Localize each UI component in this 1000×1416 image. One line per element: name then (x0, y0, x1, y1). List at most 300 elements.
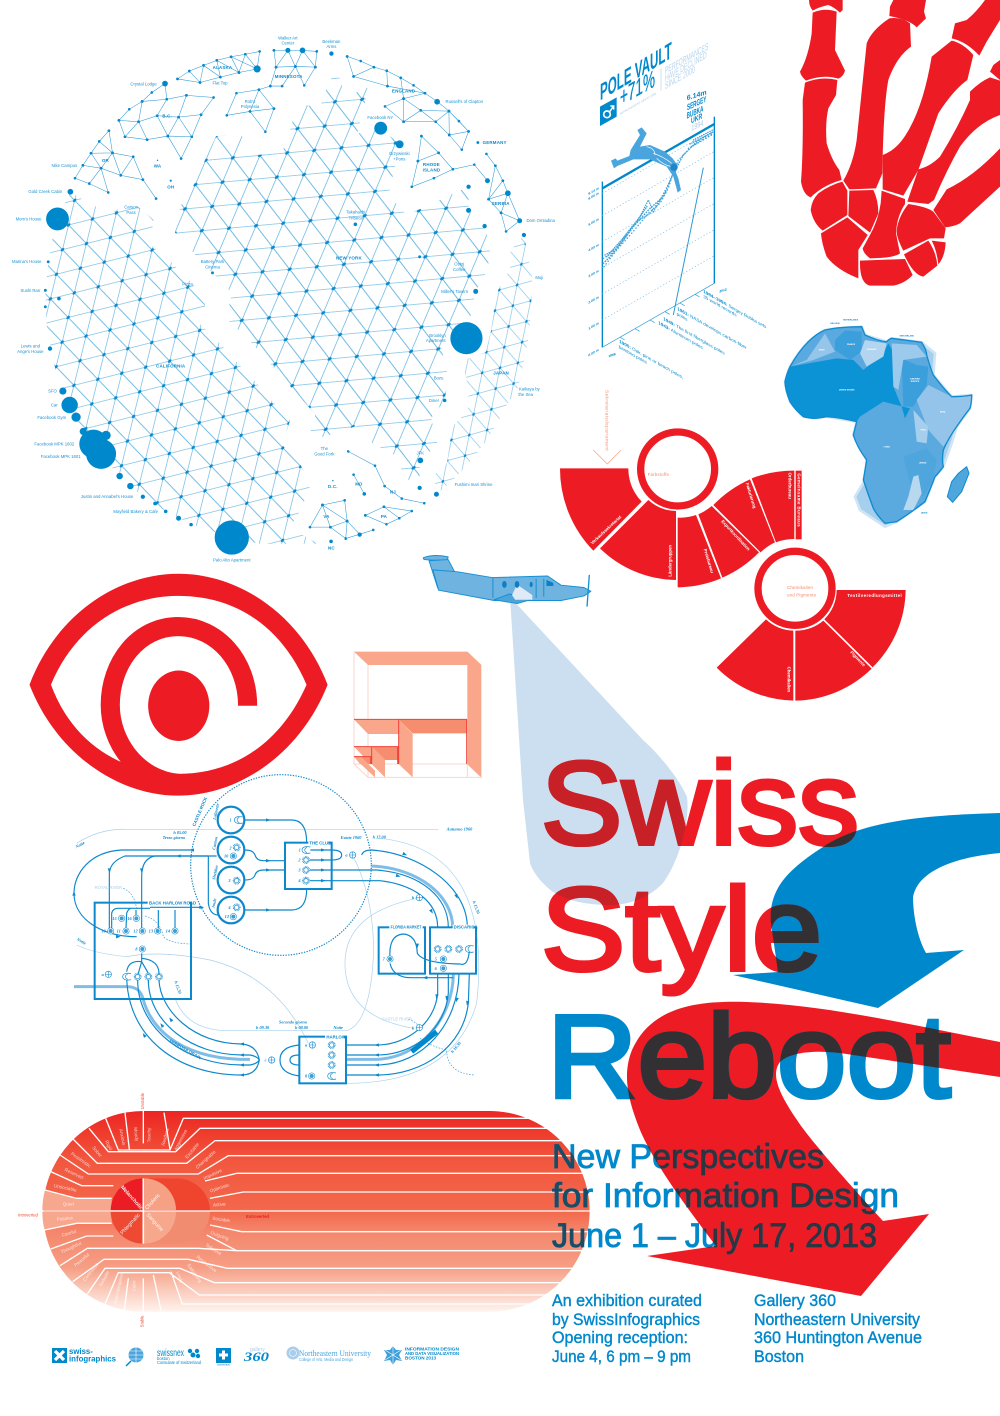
station and time labels: 12 (133, 929, 138, 934)
logo: Northeastern University (286, 1346, 371, 1362)
place labels: Lewis and (21, 343, 41, 348)
place labels: Crystal Lodge (130, 82, 157, 87)
fan: Farbstoffe: Gemeinsame Bureaus (797, 473, 802, 527)
title: Swiss Style Reboot: Style (541, 864, 822, 996)
thin pale rivers and timelines (77, 829, 479, 1083)
station and time labels: FLORIDA MARKET (391, 925, 422, 930)
figure: pole vaulter (611, 127, 681, 193)
place labels: The (321, 446, 329, 451)
station and time labels: a (305, 1043, 308, 1048)
transit-style flow diagram (72, 775, 481, 1083)
trait labels: Optimistic (209, 1182, 231, 1193)
fan: Chemikalien und Pigmente: Pigmente (849, 650, 867, 668)
station and time labels: h 08.00 (295, 1025, 309, 1030)
temperament quadrants: Sanguine (145, 1212, 164, 1233)
station and time labels: h 12.00 (373, 835, 387, 840)
place labels: Grzywinski (389, 151, 410, 156)
place labels: JAPAN (493, 370, 509, 375)
heading: SINCE 2000 (665, 65, 695, 92)
station and time labels: h 15.30 (173, 980, 183, 995)
text block: venue: Gallery 360 (754, 1292, 836, 1310)
text block: venue: 360 Huntington Avenue (754, 1329, 922, 1347)
place labels: Takahachi (346, 210, 365, 215)
axis labels: 0.00 m (588, 348, 599, 358)
station and time labels: 1 (299, 847, 301, 852)
trait labels: Reserved (64, 1167, 84, 1180)
subtitle and dates: for Information Design (552, 1177, 899, 1215)
station and time labels: Secondo giorno (279, 1020, 308, 1025)
place labels: Pizza (182, 282, 193, 287)
axis labels: Stable (139, 1315, 144, 1327)
personality temperament diagram (pill) (18, 1092, 610, 1327)
timeline notes: 1949: The first fiberglass poles (663, 316, 725, 357)
location circles sized by importance (44, 47, 526, 555)
place labels: NC (328, 545, 335, 550)
logo: gallery 360: 360 (243, 1350, 270, 1364)
blue arrow (733, 813, 1000, 1008)
record holder label: UKR (691, 111, 702, 125)
place labels: Center (281, 41, 295, 46)
record holder label: SERGEY (687, 94, 706, 112)
timeline notes: bamboo poles (619, 344, 647, 366)
place labels: Fushimi Inari Shrine (455, 482, 493, 487)
map labels: FRANCE (847, 343, 856, 346)
fan: Chemikalien und Pigmente: und Pigmente (787, 592, 817, 597)
timeline notes: 1984–1994: Sergey Bubka sets (703, 289, 767, 331)
trait labels: Touchy (147, 1127, 152, 1142)
route lines (74, 820, 469, 1076)
place labels: Miller's Tavern (441, 289, 469, 294)
heading: IMPROVEMENT SINCE 1896 (620, 91, 656, 116)
timeline notes: poles (677, 311, 688, 323)
place labels: Coffee (453, 267, 466, 272)
place labels: Cinema (205, 265, 220, 270)
place labels: GERMANY (483, 140, 507, 145)
mesh: California (45, 192, 317, 544)
timeline notes: 35 world records (703, 294, 737, 319)
place labels: Marina's House (12, 259, 42, 264)
heading: HAVE DECLINED (665, 50, 707, 84)
place labels: Rob's (245, 99, 255, 104)
station and time labels: Notte (75, 936, 87, 946)
station and time labels: 12 (225, 914, 230, 919)
trait labels: Easygoing (186, 1263, 203, 1284)
place labels: Facebook NY (367, 115, 393, 120)
place labels: MINNESOTA (275, 74, 303, 79)
trait labels: Active (213, 1202, 226, 1207)
text block: exhibition details: by SwissInfographics (552, 1311, 700, 1329)
trait labels: Calm (132, 1280, 137, 1291)
place labels: Dom Omladina (526, 218, 556, 223)
station and time labels: DISCARICA (454, 925, 479, 930)
place labels: Walker Art (278, 35, 298, 40)
temperament quadrants: Phlegmatic (120, 1212, 142, 1236)
lighter left sectors: Quiet and Passive (42, 1190, 112, 1230)
heading: PERFORMANCES (665, 42, 708, 77)
fan: Farbstoffe: Verkaufssekretariat (590, 514, 623, 545)
place labels: CALIFORNIA (156, 363, 186, 368)
station and time labels: h 16.30 (450, 1040, 462, 1054)
station and time labels: 3 (227, 878, 231, 883)
heading (600, 37, 708, 116)
subtitle and dates: New Perspectives (552, 1138, 824, 1176)
station and time labels: 16 (127, 916, 132, 921)
station and time labels: 6 (435, 966, 438, 971)
place labels: Justin and Annabel's House (81, 494, 134, 499)
station and time labels: 14 (166, 929, 171, 934)
map labels: BELGIUM (830, 323, 840, 325)
axis labels: Unstable (140, 1092, 145, 1109)
station and time labels: h 09.30 (256, 1025, 270, 1030)
place labels: the Sea (518, 392, 534, 397)
place labels: Mayfield Bakery & Cafe (113, 509, 159, 514)
map labels: SPAIN (819, 349, 825, 352)
logo: swissnex: swissnex (157, 1347, 184, 1359)
place labels: Nike Campus (51, 163, 77, 168)
station and time labels: Autunno 1960 (446, 827, 473, 832)
nested 3D treemap (354, 652, 481, 777)
trait labels: Peaceful (73, 1252, 90, 1268)
place labels: Good Fork (314, 451, 335, 456)
station and time labels: Joule (210, 898, 217, 910)
title: Swiss Style Reboot: Style (541, 864, 822, 996)
place labels: Brooklyn (429, 333, 446, 338)
fan: Farbstoffe: Fakturierung (745, 482, 757, 509)
place labels: Gold Creek Cabin (28, 189, 63, 194)
station and time labels: Estate 1960 (340, 835, 362, 840)
place labels: Bozu (434, 376, 444, 381)
record holder label: 1994 (691, 118, 704, 133)
logo: swiss-infographics: swiss- (69, 1347, 93, 1356)
logo: globe magnifier (126, 1348, 144, 1366)
red arrow (627, 1002, 1000, 1296)
station and time labels: 10 (101, 929, 106, 934)
station and time labels: b (412, 1025, 415, 1030)
map: Africa with country sizes (785, 318, 972, 527)
trait labels: Passive (57, 1215, 74, 1222)
trait labels: Quiet (63, 1202, 75, 1207)
place labels: Apartment (426, 338, 446, 343)
place labels: Pass (126, 210, 136, 215)
map labels: NETHERLANDS (843, 318, 859, 321)
station and time labels (74, 796, 481, 1078)
scatter of record heights (603, 130, 713, 267)
temperament quadrants (111, 1178, 176, 1244)
station and time labels: a (102, 972, 105, 977)
station and time labels: h 15.30 (472, 900, 481, 915)
trait labels: Sociable (212, 1216, 231, 1223)
logo: swissnex (157, 1347, 202, 1365)
mesh: Japan (434, 235, 532, 494)
station and time labels: Lafayette (212, 803, 220, 821)
trait labels: Pessimistic (70, 1151, 92, 1169)
station and time labels: ROYAL RIVER (95, 885, 122, 890)
pole vault axis and timeline labels (588, 186, 767, 381)
timeline notes: 1900: Oak, pine or beach poles, (619, 339, 683, 381)
island: Madagascar (947, 467, 969, 502)
record holder label: 6.14m (687, 88, 707, 102)
title: Swiss Style Reboot: Style (541, 864, 822, 996)
axis labels: 5.00 m (588, 217, 599, 227)
station and time labels: 1 (229, 818, 232, 823)
station and time labels: HARLOW (326, 1034, 347, 1039)
icon: eye (30, 574, 328, 796)
trait labels: Talkative (204, 1242, 223, 1257)
place labels: Ostoj (454, 262, 464, 267)
trait labels: Aggressive (173, 1128, 188, 1151)
station and time labels: 11 (117, 929, 121, 934)
station and time labels: b (412, 895, 415, 900)
axis labels: 1.00 m (588, 321, 599, 331)
place labels: D.C. (328, 484, 338, 489)
map labels: PERU (921, 429, 927, 431)
trait labels: Lively (175, 1271, 184, 1284)
trait labels: Impulsive (203, 1168, 223, 1181)
place labels: Ange's House (17, 349, 44, 354)
fan: Chemikalien und Pigmente: Textilveredlungsmittel (847, 593, 902, 598)
place labels: Beekman (322, 39, 341, 44)
axis labels: 2012 (719, 287, 727, 294)
place labels: B.C. (162, 113, 172, 118)
inner half-stadium (143, 1178, 210, 1244)
place labels: ENGLAND (392, 88, 416, 93)
station and time labels: 2 (228, 845, 232, 850)
logo: information design conference: INFORMATION DESIGN (405, 1346, 460, 1352)
axis labels (18, 1092, 270, 1327)
record holder label (687, 88, 707, 133)
trait labels: Unsociable (54, 1183, 77, 1193)
logo: Switzerland flag: Switzerland (217, 1364, 231, 1366)
logo: information design conference (384, 1346, 460, 1365)
fan: Farbstoffe: Exportkoordination (720, 519, 751, 552)
map labels: UNITED STATES (839, 389, 855, 392)
chart axes and grid (602, 117, 714, 347)
place labels: Car (51, 402, 58, 407)
fan: Chemikalien und Pigmente: Chemikalien (787, 585, 814, 590)
trait labels: Excitable (184, 1142, 200, 1160)
fan: Farbstoffe: Orderbureau (787, 473, 792, 499)
title: Swiss Style Reboot (544, 756, 952, 1100)
map labels (819, 318, 946, 515)
text block: exhibition details (552, 1292, 702, 1366)
place labels: ISLAND (423, 167, 441, 172)
trait labels: Moody (133, 1127, 139, 1142)
place labels: Polynesia (241, 104, 260, 109)
station and time labels: 8 (135, 947, 138, 952)
place labels: ALASKA (213, 65, 233, 70)
terminal circles (218, 807, 244, 923)
trait labels: Outgoing (210, 1230, 230, 1241)
logo: swissnex: boston (157, 1356, 170, 1361)
hand skeleton illustration (800, 0, 1000, 286)
timeline notes: 1943: Aluminum poles (658, 320, 703, 351)
place labels: +Pons (393, 156, 405, 161)
logo: swiss-infographics: infographics (69, 1354, 117, 1364)
station and time labels: 4 (297, 878, 301, 883)
map labels: GERMANY (867, 348, 877, 351)
place labels: Muji (535, 275, 543, 280)
map labels: UNITED (919, 462, 927, 464)
axis labels: 6.00 m (588, 191, 599, 201)
station and time labels: c (265, 1058, 267, 1063)
title: Swiss Style Reboot: Swiss (541, 738, 859, 870)
spotlight cone from the plane (510, 597, 688, 905)
place labels: Flat Top (212, 81, 228, 86)
place labels: Sushi Ran (21, 288, 41, 293)
station and time labels: 10 (224, 854, 229, 859)
station and time labels: FERROSA DRAIN (168, 1038, 202, 1060)
logo: gallery 360 (243, 1347, 270, 1364)
direction arrowheads (72, 818, 469, 1077)
small arrow and department label: Sekretariatsdepartement (604, 390, 609, 451)
fan: Chemikalien und Pigmente (717, 551, 906, 701)
station and time labels: a (345, 852, 348, 857)
place labels: Facebook Gym (37, 415, 67, 420)
fan: Chemikalien und Pigmente: Chemikalien (787, 667, 792, 693)
station boxes (95, 843, 476, 1083)
title: Swiss Style Reboot: Reboot (547, 991, 951, 1123)
icon: airplane (423, 556, 591, 607)
map labels: JAPAN (921, 512, 928, 515)
place labels: NJ (390, 490, 396, 495)
logo: Northeastern University: Northeastern University (299, 1349, 371, 1358)
trait labels: Reliable (98, 1270, 111, 1287)
place labels: PA (381, 514, 388, 519)
place labels: VA (323, 514, 330, 519)
title: Swiss Style Reboot: Reboot (547, 991, 951, 1123)
axis labels: Introverted (18, 1212, 39, 1217)
trait labels: Responsive (195, 1254, 218, 1274)
axis labels: 6.14 m (588, 186, 599, 196)
subtitle and dates: for Information Design (552, 1177, 899, 1215)
subtitle and dates: New Perspectives (552, 1138, 824, 1176)
station and time labels: 15 (112, 916, 117, 921)
place labels: Mom's House (16, 216, 42, 221)
pill background with gradient (43, 1111, 590, 1312)
axis labels: 3.00 m (588, 269, 599, 279)
axis labels: 1896 (608, 352, 616, 358)
place labels: SERBIA (492, 201, 510, 206)
axis labels (588, 186, 727, 358)
place labels: MD (355, 482, 363, 487)
map labels: CHINA (884, 445, 890, 448)
station and time labels: 7 (383, 957, 386, 962)
subtitle and dates: June 1 – July 17, 2013 (552, 1217, 877, 1255)
mesh: small regions (75, 50, 520, 539)
place labels: Diner (429, 398, 440, 403)
text block: exhibition details: June 4, 6 pm – 9 pm (552, 1348, 691, 1366)
text block: exhibition details: An exhibition curated (552, 1292, 702, 1310)
text block: exhibition details: Opening reception: (552, 1329, 688, 1347)
timeline notes (619, 289, 767, 381)
text block: venue (754, 1292, 922, 1366)
station and time labels: Sheldon (211, 864, 219, 880)
logo: swissnex: Consulate of Switzerland (157, 1360, 202, 1365)
thick shared lanes (74, 866, 453, 1059)
station and time labels: 8 (305, 1073, 308, 1078)
trait labels: Sober (91, 1145, 103, 1158)
axis labels: 2.00 m (588, 295, 599, 305)
place labels: Arms (326, 44, 336, 49)
trait labels: Even-tempered (113, 1272, 124, 1304)
station symbols (105, 817, 474, 1079)
logo: information design conference: BOSTON 2013 (405, 1356, 437, 1360)
small arrow and department label (593, 390, 621, 464)
text block: venue: Boston (754, 1348, 804, 1366)
temperament quadrants: Melancholic (119, 1185, 144, 1211)
subtitle and dates (552, 1138, 899, 1255)
map labels: EUROPE (911, 381, 920, 383)
subtitle and dates: June 1 – July 17, 2013 (552, 1217, 877, 1255)
timeline notes: 1961: NASA develops carbon-fiber (677, 306, 747, 351)
trait labels: Rigid (104, 1139, 114, 1152)
station and time labels: 13 (149, 929, 154, 934)
isometric chart: pole vault (600, 37, 714, 347)
logo: Northeastern University: College of Arts, Media and Design (299, 1357, 354, 1362)
title: Swiss Style Reboot: Swiss (541, 738, 859, 870)
trait labels: Anxious (118, 1128, 127, 1146)
place labels: Russell's of Clapton (445, 99, 484, 104)
station and time labels: 2 (297, 857, 301, 862)
place labels: Facebook MPK 1601 (41, 454, 81, 459)
station and time labels: CASTLE RIVER (382, 1017, 412, 1022)
title: Swiss Style Reboot: Swiss (541, 738, 859, 870)
station and time labels: Terzo giorno (163, 835, 186, 840)
station and time labels: THE CLUB (309, 840, 331, 845)
place labels: OH (167, 185, 174, 190)
station and time labels: 3 (297, 868, 301, 873)
trait labels (54, 1127, 231, 1304)
axis labels: Extroverted (246, 1214, 270, 1219)
station and time labels: Notte (74, 840, 86, 850)
place labels: WA (154, 163, 162, 168)
icon: male symbol (600, 97, 617, 126)
place labels: Carson (124, 205, 139, 210)
place labels: Tribeca (349, 215, 363, 220)
station and time labels: 4 (227, 905, 231, 910)
logo: gallery 360: gallery (250, 1347, 265, 1353)
place labels: RHODE (423, 162, 440, 167)
text block: venue: Northeastern University (754, 1311, 921, 1329)
dashed circle: Castle Rock (191, 775, 371, 955)
logo: information design conference: AND DATA VISUALIZATION (405, 1351, 460, 1356)
map labels: INDIA (940, 411, 946, 414)
subtitle and dates: June 1 – July 17, 2013 (552, 1217, 877, 1255)
fan: Farbstoffe (560, 432, 802, 587)
place labels: Kaikaya by (519, 387, 541, 392)
organisational fan diagrams (560, 390, 906, 701)
place labels: NEW YORK (336, 256, 362, 261)
subtitle and dates: New Perspectives (552, 1138, 824, 1176)
station and time labels: Notte (332, 1025, 343, 1030)
place labels (12, 35, 556, 562)
trait labels: Controlled (82, 1262, 100, 1282)
place labels: OR (102, 158, 109, 163)
temperament quadrants: Choleric (144, 1192, 162, 1211)
trait labels: Changeable (195, 1149, 217, 1170)
map labels: SWITZERLAND (899, 335, 914, 338)
station and time labels: Canton (211, 836, 219, 850)
subtitle and dates: for Information Design (552, 1177, 899, 1215)
heading: +71% (620, 66, 655, 112)
place labels: Battery Park (201, 259, 225, 264)
logo: swiss-infographics (52, 1347, 117, 1364)
station and time labels: 5 (435, 957, 438, 962)
station and time labels: h 05.00 (173, 830, 187, 835)
record holder label: BUBKA (687, 104, 704, 121)
station and time labels: CASTLE ROCK (191, 796, 208, 827)
logo: Switzerland flag (216, 1348, 231, 1366)
